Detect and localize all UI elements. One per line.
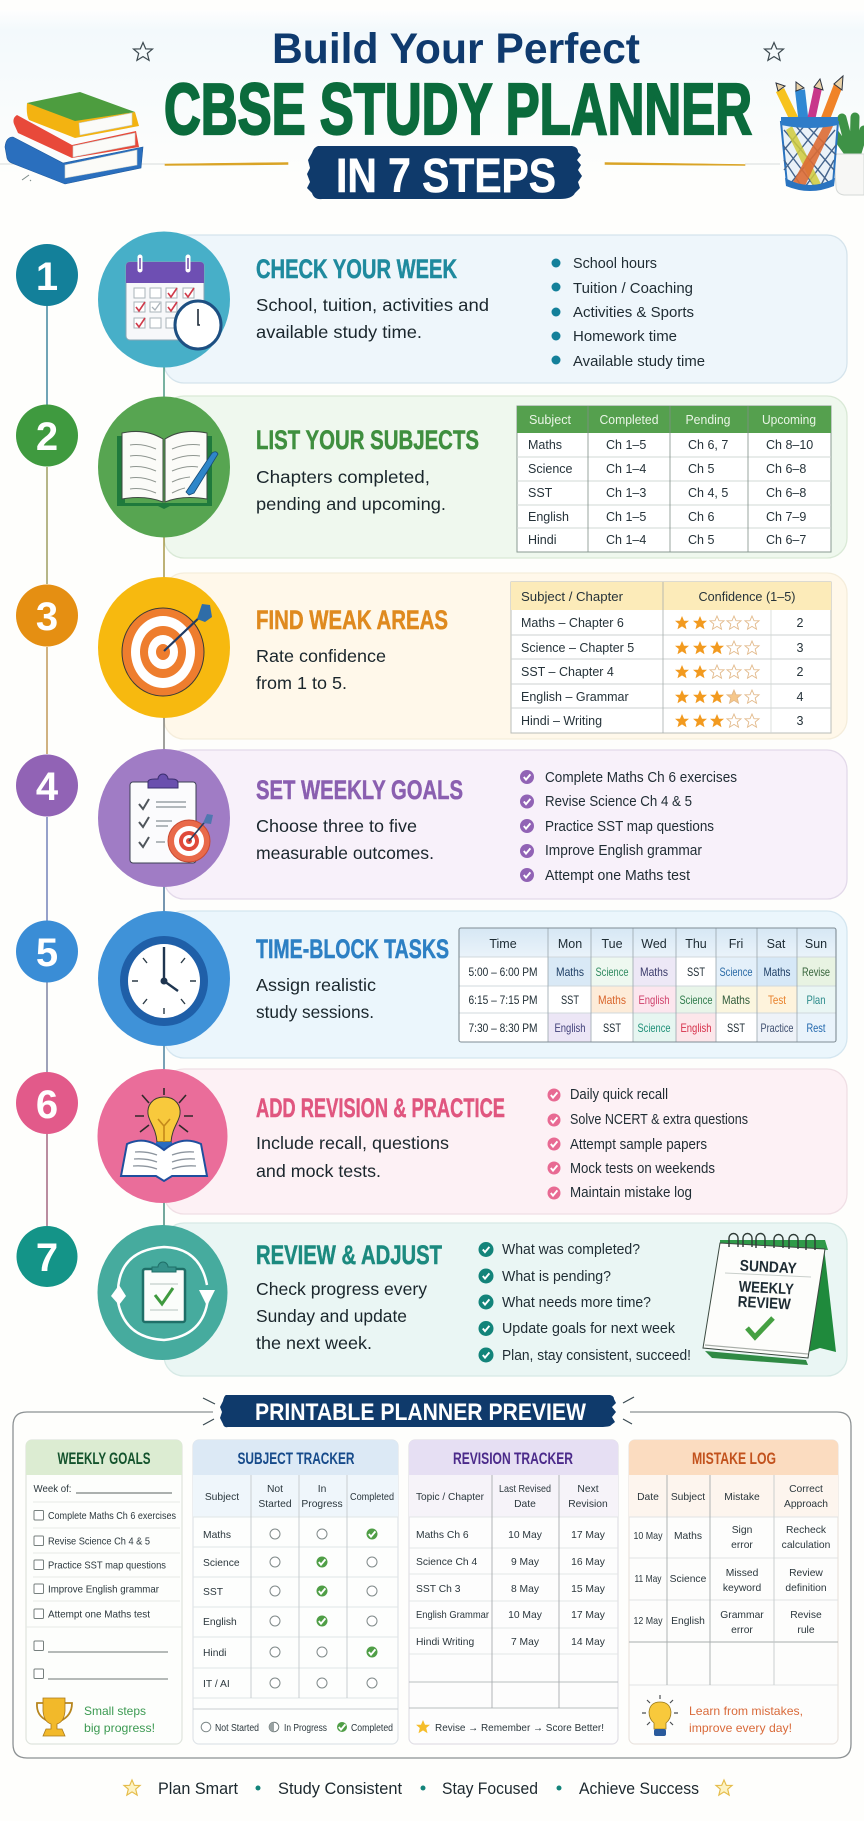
step 1 (16, 232, 847, 400)
icon: review cycle clipboard (98, 1225, 228, 1360)
icon: open book and pencil (98, 396, 230, 538)
description: Include recall, questions (256, 1133, 449, 1153)
check list: What needs more time? (502, 1295, 651, 1311)
table: weekly timetable: 6:15 – 7:15 PM (468, 993, 538, 1007)
table: weekly timetable: Sat (767, 937, 786, 951)
table: subjects: Hindi (528, 533, 556, 547)
heading: SET WEEKLY GOALS (256, 775, 463, 805)
description: Choose three to five (256, 816, 417, 836)
description (256, 646, 386, 693)
description: study sessions. (256, 1002, 374, 1022)
mistake rows: Grammar (720, 1610, 764, 1621)
icon: star left (134, 43, 152, 60)
table: weekly timetable: Science (720, 965, 753, 979)
heading: CHECK YOUR WEEK (256, 254, 457, 284)
icon: star left (124, 1780, 140, 1795)
table: subjects (517, 406, 831, 552)
table: subjects: Ch 1–4 (606, 462, 646, 476)
table: weekly timetable: SST (603, 1021, 622, 1035)
table: subjects: Ch 6 (688, 510, 714, 524)
star ratings (675, 616, 759, 727)
table: subjects: Subject (529, 413, 572, 427)
description: available study time. (256, 322, 422, 342)
table: weekly timetable: English (554, 1021, 586, 1035)
table: weekly timetable: English (638, 993, 670, 1007)
number badge 1: 1 (36, 255, 58, 299)
table: confidence ratings: 3 (797, 714, 804, 728)
table: subjects: Pending (686, 413, 731, 427)
number badge 4: 4 (36, 765, 59, 809)
mistake rows: error (731, 1625, 753, 1636)
bullet list: Available study time (573, 354, 705, 370)
card: revision tracker (409, 1440, 618, 1744)
revision rows: 7 May (511, 1637, 540, 1648)
table: subjects: Ch 6–8 (766, 462, 806, 476)
mistake rows: 10 May (634, 1531, 663, 1542)
header (0, 25, 864, 203)
number badge 7: 7 (36, 1236, 58, 1280)
timeline segment 5 (46, 982, 48, 1072)
footer note: Revise → Remember → Score Better! (435, 1722, 604, 1734)
table: weekly timetable: Maths (722, 993, 750, 1007)
table: subjects: Science (528, 462, 573, 476)
number badge 7 (16, 1226, 78, 1287)
table: weekly timetable: Maths (764, 965, 790, 979)
table: confidence ratings: SST – Chapter 4 (521, 665, 614, 679)
card heading: WEEKLY GOALS (58, 1450, 150, 1468)
checklist items (34, 1510, 176, 1679)
revision rows: Hindi Writing (416, 1637, 474, 1648)
description: and mock tests. (256, 1161, 381, 1181)
revision rows: 17 May (571, 1530, 606, 1541)
description (256, 295, 489, 342)
bullet list: Activities & Sports (573, 305, 694, 321)
step 2 (16, 396, 847, 578)
mistake rows: 12 May (634, 1616, 663, 1627)
heading: ADD REVISION & PRACTICE (256, 1093, 505, 1123)
description: School, tuition, activities and (256, 295, 489, 315)
table headers: Correct (789, 1484, 823, 1495)
icon: potted plant (834, 117, 864, 195)
icon: stack of books (5, 92, 143, 184)
check list: Improve English grammar (545, 843, 702, 859)
section banner: PRINTABLE PLANNER PREVIEW (255, 1399, 586, 1426)
checklist items: Attempt one Maths test (48, 1610, 150, 1620)
heading: LIST YOUR SUBJECTS (256, 425, 479, 455)
bullet list (552, 256, 705, 370)
footer slogan: Achieve Success (579, 1779, 699, 1798)
table: subjects: Ch 5 (688, 533, 714, 547)
table: confidence ratings: 2 (797, 665, 804, 679)
table: confidence ratings: Science – Chapter 5 (521, 641, 634, 655)
timeline segment 3 (46, 647, 48, 754)
table: weekly timetable: Maths (598, 993, 626, 1007)
card heading: SUBJECT TRACKER (238, 1450, 355, 1468)
icon: trophy (37, 1698, 72, 1736)
motivational note (689, 1704, 803, 1735)
icon: light bulb over book (98, 1069, 228, 1203)
table: confidence ratings: 3 (797, 641, 804, 655)
checklist items: Complete Maths Ch 6 exercises (48, 1511, 176, 1522)
motivational note (84, 1704, 155, 1735)
icon: sunday weekly review desk calendar: SUNDAY (739, 1258, 798, 1278)
table: confidence ratings: Confidence (1–5) (698, 590, 796, 604)
table: weekly timetable: Thu (685, 937, 707, 951)
panel: find weak areas (164, 573, 847, 739)
icon: star right (716, 1780, 732, 1795)
panel: list your subjects (164, 396, 847, 558)
table headers (416, 1484, 608, 1510)
subject rows: IT / AI (203, 1679, 230, 1690)
bullet list: Homework time (573, 329, 677, 345)
table: subjects: Completed (600, 413, 659, 427)
check list: What was completed? (502, 1242, 640, 1258)
description (256, 467, 446, 514)
motivational note: Learn from mistakes, (689, 1704, 803, 1718)
table headers: Subject (205, 1492, 239, 1503)
table: weekly timetable: 7:30 – 8:30 PM (468, 1021, 538, 1035)
table headers: Next (577, 1484, 599, 1495)
mistake rows: definition (785, 1583, 827, 1594)
icon: light bulb (642, 1695, 678, 1736)
table: subjects: Ch 1–4 (606, 533, 646, 547)
step 5 (16, 911, 847, 1072)
connector to step 3 (163, 536, 165, 578)
timeline segment 4 (46, 817, 48, 921)
connector to step 2 (163, 366, 165, 400)
icon: star right (765, 43, 783, 60)
table: weekly timetable: Practice (760, 1021, 794, 1035)
icon: sunday weekly review desk calendar (703, 1234, 836, 1365)
table headers: Last Revised (499, 1484, 551, 1495)
icon: clipboard with target (98, 749, 230, 887)
description: the next week. (256, 1333, 372, 1353)
table: subjects: Ch 5 (688, 462, 714, 476)
table: weekly timetable: Mon (558, 937, 582, 951)
subject rows: SST (203, 1587, 224, 1598)
motivational note: improve every day! (689, 1721, 792, 1735)
card: weekly goals: Week of: (34, 1483, 72, 1495)
panel: check your week (164, 235, 847, 383)
table headers (637, 1484, 828, 1510)
mistake rows: rule (797, 1625, 815, 1636)
revision rows: SST Ch 3 (416, 1584, 461, 1595)
check list (520, 770, 737, 884)
table: subjects: Ch 1–3 (606, 486, 646, 500)
description: Sunday and update (256, 1306, 407, 1326)
icon: sunday weekly review desk calendar: REVIEW (737, 1294, 791, 1313)
revision rows: 10 May (508, 1610, 543, 1621)
table: weekly timetable (459, 928, 836, 1042)
number badge 3: 3 (36, 595, 58, 639)
card heading: REVISION TRACKER (453, 1450, 573, 1468)
bullet list: School hours (573, 256, 657, 272)
table headers: Not (267, 1484, 283, 1495)
check list: Revise Science Ch 4 & 5 (545, 794, 692, 810)
bullet list: Tuition / Coaching (573, 281, 693, 297)
table: subjects: SST (528, 486, 553, 500)
number badge 1 (16, 244, 78, 306)
table: subjects: Ch 6–8 (766, 486, 806, 500)
description: Check progress every (256, 1279, 427, 1299)
table: subjects: Upcoming (762, 413, 816, 427)
table: weekly timetable: Tue (601, 937, 623, 951)
step 6 (16, 1069, 847, 1228)
card: weekly goals (26, 1440, 182, 1744)
table: confidence ratings: Hindi – Writing (521, 714, 602, 728)
footer slogan (124, 1779, 732, 1798)
table: weekly timetable: Wed (641, 937, 667, 951)
mistake rows: English (671, 1616, 705, 1627)
legend: Not Started (215, 1723, 259, 1734)
table: subjects: English (528, 510, 569, 524)
description (256, 975, 376, 1022)
description: Rate confidence (256, 646, 386, 666)
check list (548, 1087, 748, 1201)
number badge 6: 6 (36, 1083, 58, 1127)
panel: review and adjust (164, 1223, 847, 1376)
mistake rows: calculation (782, 1540, 831, 1551)
table: confidence ratings (511, 582, 831, 733)
revision rows: English Grammar (416, 1610, 490, 1621)
printable planner preview section (13, 1395, 851, 1758)
table: subjects: Ch 7–9 (766, 510, 806, 524)
footer slogan: Plan Smart (158, 1779, 238, 1798)
table: weekly timetable: Time (489, 937, 517, 951)
table: confidence ratings: 2 (797, 616, 804, 630)
motivational note: big progress! (84, 1721, 155, 1735)
mistake rows: Sign (732, 1525, 753, 1536)
connector to step 5 (163, 886, 165, 914)
table headers: Date (514, 1499, 536, 1510)
table: weekly timetable: Science (596, 965, 629, 979)
check list: Maintain mistake log (570, 1185, 692, 1201)
table: confidence ratings: Subject / Chapter (521, 590, 623, 604)
step 7 (16, 1223, 847, 1376)
mistake rows: Review (789, 1568, 823, 1579)
table: weekly timetable: Sun (805, 937, 827, 951)
description (256, 1279, 427, 1353)
table: weekly timetable: SST (687, 965, 706, 979)
subject rows: English (203, 1617, 237, 1628)
table headers: Date (637, 1492, 659, 1503)
icon: calendar with clock (98, 232, 230, 368)
table: weekly timetable: Revise (802, 965, 830, 979)
number badge 3 (16, 584, 78, 646)
subject rows (203, 1528, 378, 1690)
banner rays (203, 1397, 634, 1425)
timeline: numbered connector line (46, 306, 48, 405)
table: confidence ratings: English – Grammar (521, 690, 629, 704)
step 3 (16, 573, 847, 752)
table: weekly timetable: Rest (806, 1021, 826, 1035)
check list: Attempt one Maths test (545, 868, 690, 884)
check list (478, 1242, 691, 1364)
icon: sunday weekly review desk calendar: WEEKLY (738, 1279, 795, 1298)
step 4 (16, 749, 847, 914)
table: subjects: Ch 6–7 (766, 533, 806, 547)
checklist items: Improve English grammar (48, 1584, 160, 1596)
table: weekly timetable: Science (638, 1021, 671, 1035)
table: subjects: Ch 8–10 (766, 438, 813, 452)
mistake rows: keyword (723, 1583, 761, 1594)
heading: FIND WEAK AREAS (256, 605, 448, 635)
revision rows: 17 May (571, 1610, 606, 1621)
check list: Attempt sample papers (570, 1137, 707, 1153)
connector to step 6 (163, 1045, 165, 1072)
table: weekly timetable: Fri (729, 937, 743, 951)
table headers: Progress (301, 1499, 343, 1510)
table headers: Subject (671, 1492, 705, 1503)
timeline segment 6 (46, 1134, 48, 1226)
revision rows: 14 May (571, 1637, 606, 1648)
mistake rows: 11 May (634, 1574, 662, 1585)
check list: What is pending? (502, 1269, 611, 1285)
description (256, 816, 434, 863)
table: subjects: Ch 1–5 (606, 510, 646, 524)
number badge 2: 2 (36, 415, 58, 459)
check list: Complete Maths Ch 6 exercises (545, 770, 737, 786)
description: measurable outcomes. (256, 843, 434, 863)
table: confidence ratings: 4 (797, 690, 804, 704)
legend (201, 1722, 393, 1734)
panel: add revision and practice (164, 1069, 847, 1214)
mistake rows: Maths (674, 1531, 702, 1542)
banner: in 7 steps: IN 7 STEPS (336, 150, 556, 203)
revision rows (416, 1530, 606, 1648)
number badge 5 (16, 920, 78, 982)
heading: REVIEW & ADJUST (256, 1240, 442, 1270)
table headers: In (318, 1484, 327, 1495)
icon: clock (98, 911, 230, 1046)
mistake rows (634, 1525, 831, 1636)
decorative gold lines (0, 162, 780, 166)
mistake rows: error (731, 1540, 753, 1551)
table: weekly timetable: 5:00 – 6:00 PM (468, 965, 538, 979)
table: weekly timetable: SST (727, 1021, 746, 1035)
table headers: Started (258, 1499, 292, 1510)
table: subjects: Ch 1–5 (606, 438, 646, 452)
footer slogan: Stay Focused (442, 1779, 538, 1798)
table: confidence ratings: Maths – Chapter 6 (521, 616, 624, 630)
subject rows: Science (203, 1558, 240, 1569)
table headers: Mistake (724, 1492, 760, 1503)
mistake rows: Recheck (786, 1525, 827, 1536)
mistake rows: Missed (726, 1568, 759, 1579)
revision rows: 8 May (511, 1584, 540, 1595)
title line 1: Build Your Perfect (272, 25, 640, 73)
card: subject tracker (193, 1440, 398, 1744)
table headers (205, 1484, 394, 1510)
description (256, 1133, 449, 1181)
table: weekly timetable: SST (561, 993, 580, 1007)
revision rows: 9 May (511, 1557, 540, 1568)
card: mistake log (629, 1440, 838, 1744)
check list: Update goals for next week (502, 1321, 676, 1337)
revision rows: Maths Ch 6 (416, 1530, 469, 1541)
mistake rows: Revise (790, 1610, 822, 1621)
table: subjects: Maths (528, 438, 562, 452)
table: weekly timetable: Plan (806, 993, 826, 1007)
description: from 1 to 5. (256, 673, 347, 693)
revision rows: 10 May (508, 1530, 543, 1541)
connector to step 4 (163, 716, 165, 752)
check list: Solve NCERT & extra questions (570, 1112, 748, 1128)
connector to step 7 (163, 1202, 165, 1228)
number badge 2 (16, 404, 78, 466)
legend: Completed (351, 1723, 393, 1734)
description: pending and upcoming. (256, 494, 446, 514)
table: subjects: Ch 4, 5 (688, 486, 728, 500)
panel: set weekly goals (164, 750, 847, 899)
number badge 5: 5 (36, 931, 58, 975)
outer frame (13, 1412, 851, 1758)
revision rows: 15 May (571, 1584, 606, 1595)
number badge 4 (16, 754, 78, 816)
table: weekly timetable: Test (768, 993, 787, 1007)
panel: time-block tasks (164, 911, 847, 1058)
check list: Mock tests on weekends (570, 1161, 715, 1177)
checklist items: Practice SST map questions (48, 1560, 166, 1572)
mistake rows: Science (670, 1574, 707, 1585)
legend: In Progress (284, 1723, 327, 1734)
table headers: Approach (784, 1499, 828, 1510)
table: weekly timetable: Maths (556, 965, 584, 979)
checklist items: Revise Science Ch 4 & 5 (48, 1536, 150, 1548)
description: Assign realistic (256, 975, 376, 995)
description: Chapters completed, (256, 467, 430, 487)
table: subjects: Ch 6, 7 (688, 438, 728, 452)
table: weekly timetable: Maths (640, 965, 668, 979)
revision rows: Science Ch 4 (416, 1557, 478, 1568)
icon: pencil cup (776, 76, 843, 191)
card heading: MISTAKE LOG (692, 1450, 776, 1468)
footer slogan: Study Consistent (278, 1779, 402, 1798)
icon: target with dart (98, 577, 230, 718)
table headers: Revision (568, 1499, 608, 1510)
table: weekly timetable: English (680, 1021, 712, 1035)
check list: Daily quick recall (570, 1087, 668, 1103)
timeline segment 2 (46, 467, 48, 584)
heading: TIME-BLOCK TASKS (256, 934, 449, 964)
revision rows: 16 May (571, 1557, 606, 1568)
table headers: Completed (350, 1492, 394, 1503)
check list: Practice SST map questions (545, 819, 714, 835)
subject rows: Maths (203, 1530, 231, 1541)
subject rows: Hindi (203, 1648, 226, 1659)
motivational note: Small steps (84, 1704, 146, 1718)
table headers: Topic / Chapter (416, 1492, 485, 1503)
table: weekly timetable: Science (680, 993, 713, 1007)
check list: Plan, stay consistent, succeed! (502, 1348, 691, 1364)
number badge 6 (16, 1072, 78, 1134)
